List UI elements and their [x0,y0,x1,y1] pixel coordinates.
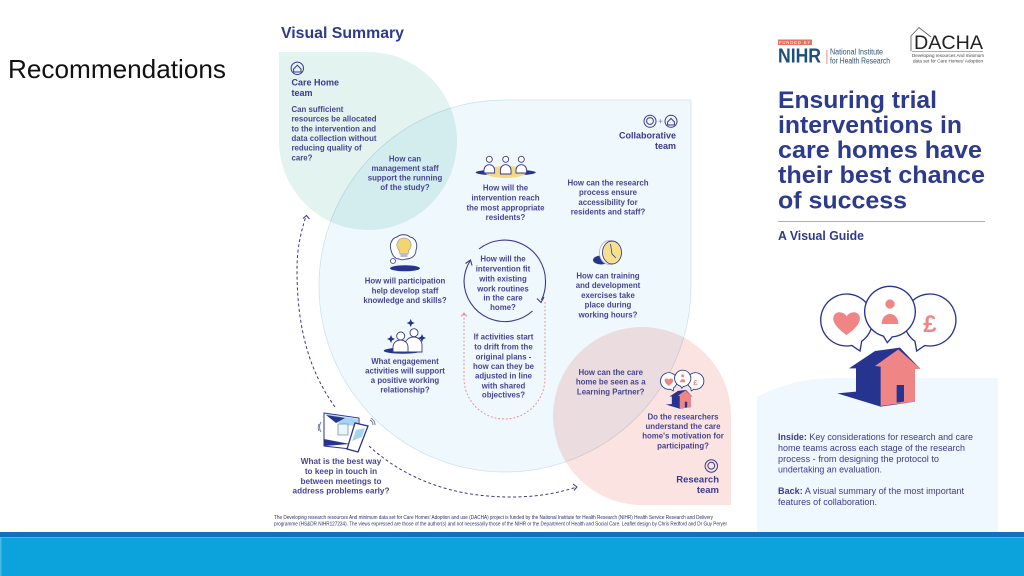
leaflet title: interventions in [778,112,962,139]
text: work routines question: intervention fit [476,265,531,274]
leaflet title: their best chance [778,162,985,189]
text: care home question: data collection without [292,134,377,143]
text: inside description: Inside: Key considerations for research and care [778,432,974,442]
text: engagement question: a positive working [371,376,439,385]
text: care home question: resources be allocated [292,115,377,124]
panel: care home team region [279,52,457,230]
text: drift question: original plans - [476,352,532,361]
slide heading: Recommendations: Recommendations [8,54,226,84]
text: engagement question: activities will support [365,367,445,376]
text: care home question: Can sufficient [292,105,344,114]
text: drift question: with shared [481,381,525,390]
text: care home question: reducing quality of [292,144,362,153]
arrow: dashed pink feedback loop [461,302,545,419]
icon: small house with speech bubbles [661,370,704,409]
text: participation question: help develop staff [372,286,439,295]
text: learning partner question: home be seen as a [576,378,646,387]
divider [778,220,985,223]
text: motivation question: home's motivation for [642,432,724,441]
icon: residents at table [476,156,536,178]
text: engagement question: What engagement [371,357,439,366]
logo: DACHA: DACHA [914,33,983,54]
panel: research team region [553,327,731,505]
logo: NIHR: FUNDED BY [779,40,811,45]
icon: light bulb thought [390,235,420,271]
text: keep in touch question: between meetings to [301,477,381,486]
text: accessibility question: How can the research [567,178,649,187]
icon: engagement people [384,319,426,354]
text: drift question: to drift from the [474,342,533,352]
icon: care home [291,62,303,74]
text: keep in touch question: address problems early? [293,486,389,495]
text: appropriate residents question: residents? [486,213,526,222]
footer band [0,532,1024,576]
icon: small house with speech bubbles: £ [693,378,698,387]
text: participation question: How will participation [365,277,446,286]
text: inside description: process - from designing the protocol to [778,454,939,464]
text: management staff question: management staff [371,164,439,173]
text: accessibility question: process ensure [579,188,638,197]
heading: research team: team [697,485,719,496]
leaflet title: of success [778,187,907,214]
text: drift question: adjusted in line [475,372,533,381]
text: motivation question: participating? [657,442,709,450]
icon: devices [318,413,375,452]
heading: care home team: Care Home [292,78,339,88]
text: work routines question: How will the [480,255,526,264]
logo: NIHR: for Health Research [830,56,890,66]
text: motivation question: Do the researchers [647,412,719,421]
visual summary heading: Visual Summary [281,25,404,42]
arrow: circular work routine cycle [464,240,546,322]
arrow: dashed arc to research team [369,446,577,497]
text: engagement question: relationship? [380,386,430,395]
logo: DACHA: Developing resources And minimum [912,53,984,58]
footnote: funding statement: The Developing research resources And minimum data set for Care Homes' Adoption and use (DACHA) project is funded by the National Institute for Health Research (NIHR) Health Service Research and Delivery [274,515,713,521]
text: training question: exercises take [581,291,635,300]
text: appropriate residents question: the most appropriate [466,204,545,212]
text: motivation question: understand the care [646,422,721,431]
panel: collaborative team region [319,100,691,472]
icon: clock [593,240,622,264]
text: management staff question: How can [389,154,421,164]
text: work routines question: with existing [478,274,527,284]
heading: collaborative team: team [655,141,676,151]
text: accessibility question: accessibility for [578,198,638,207]
text: drift question: how can they be [473,362,535,371]
text: drift question: objectives? [482,391,525,400]
logo: DACHA: data set for Care Homes' Adoption [913,58,983,63]
text: keep in touch question: to keep in touch in [305,467,377,476]
text: care home question: care? [292,153,313,162]
footnote: funding statement: programme (HS&DR NIHR127234). The views expressed are those of the author(s) and not necessarily those of the NIHR or the Department of Health and Social Care. Leaflet design by Chris Redford and Dr Guy Peryer [274,522,727,528]
text: work routines question: work routines [476,284,529,293]
text: management staff question: of the study? [380,183,430,192]
text: back description: features of collaboration. [778,497,877,507]
text: accessibility question: residents and staff? [571,208,645,216]
text: work routines question: in the care [483,294,523,303]
text: back description: Back: A visual summary of the most important [778,486,962,496]
text: training question: place during [585,301,632,310]
icon: collaborative team [644,115,677,127]
leaflet title: care homes have [778,137,982,164]
text: learning partner question: How can the care [578,368,644,377]
text: care home question: to the intervention and [292,124,376,133]
text: inside description: home teams across each stage of the research [778,443,965,453]
heading: care home team: team [292,88,313,98]
leaflet subtitle: A Visual Guide [778,229,864,243]
text: appropriate residents question: intervention reach [472,194,540,202]
text: keep in touch question: What is the best way [301,457,382,466]
leaflet title: Ensuring trial [778,87,937,114]
text: training question: and development [576,281,641,290]
text: drift question: If activities start [474,333,534,342]
heading: collaborative team: Collaborative [619,130,676,140]
logo: NIHR: National Institute [830,48,883,56]
icon: house with speech bubbles: £ [923,311,937,338]
text: training question: working hours? [578,310,638,319]
logo: DACHA [911,28,984,63]
icon: house with speech bubbles [821,286,956,407]
logo: NIHR: NIHR [778,46,821,68]
text: learning partner question: Learning Partner? [577,388,645,397]
arrow: dashed arc to care home team [297,216,335,407]
icon: research team [705,460,718,472]
text: participation question: knowledge and skills? [363,296,447,305]
text: appropriate residents question: How will the [483,184,529,193]
heading: research team: Research [676,474,719,486]
text: training question: How can training [576,272,640,280]
text: management staff question: support the running [368,174,442,182]
text: inside description: undertaking an evaluation. [778,464,882,474]
panel: leaflet contents background [757,378,998,532]
text: work routines question: home? [490,303,516,312]
logo: NIHR [778,40,890,68]
